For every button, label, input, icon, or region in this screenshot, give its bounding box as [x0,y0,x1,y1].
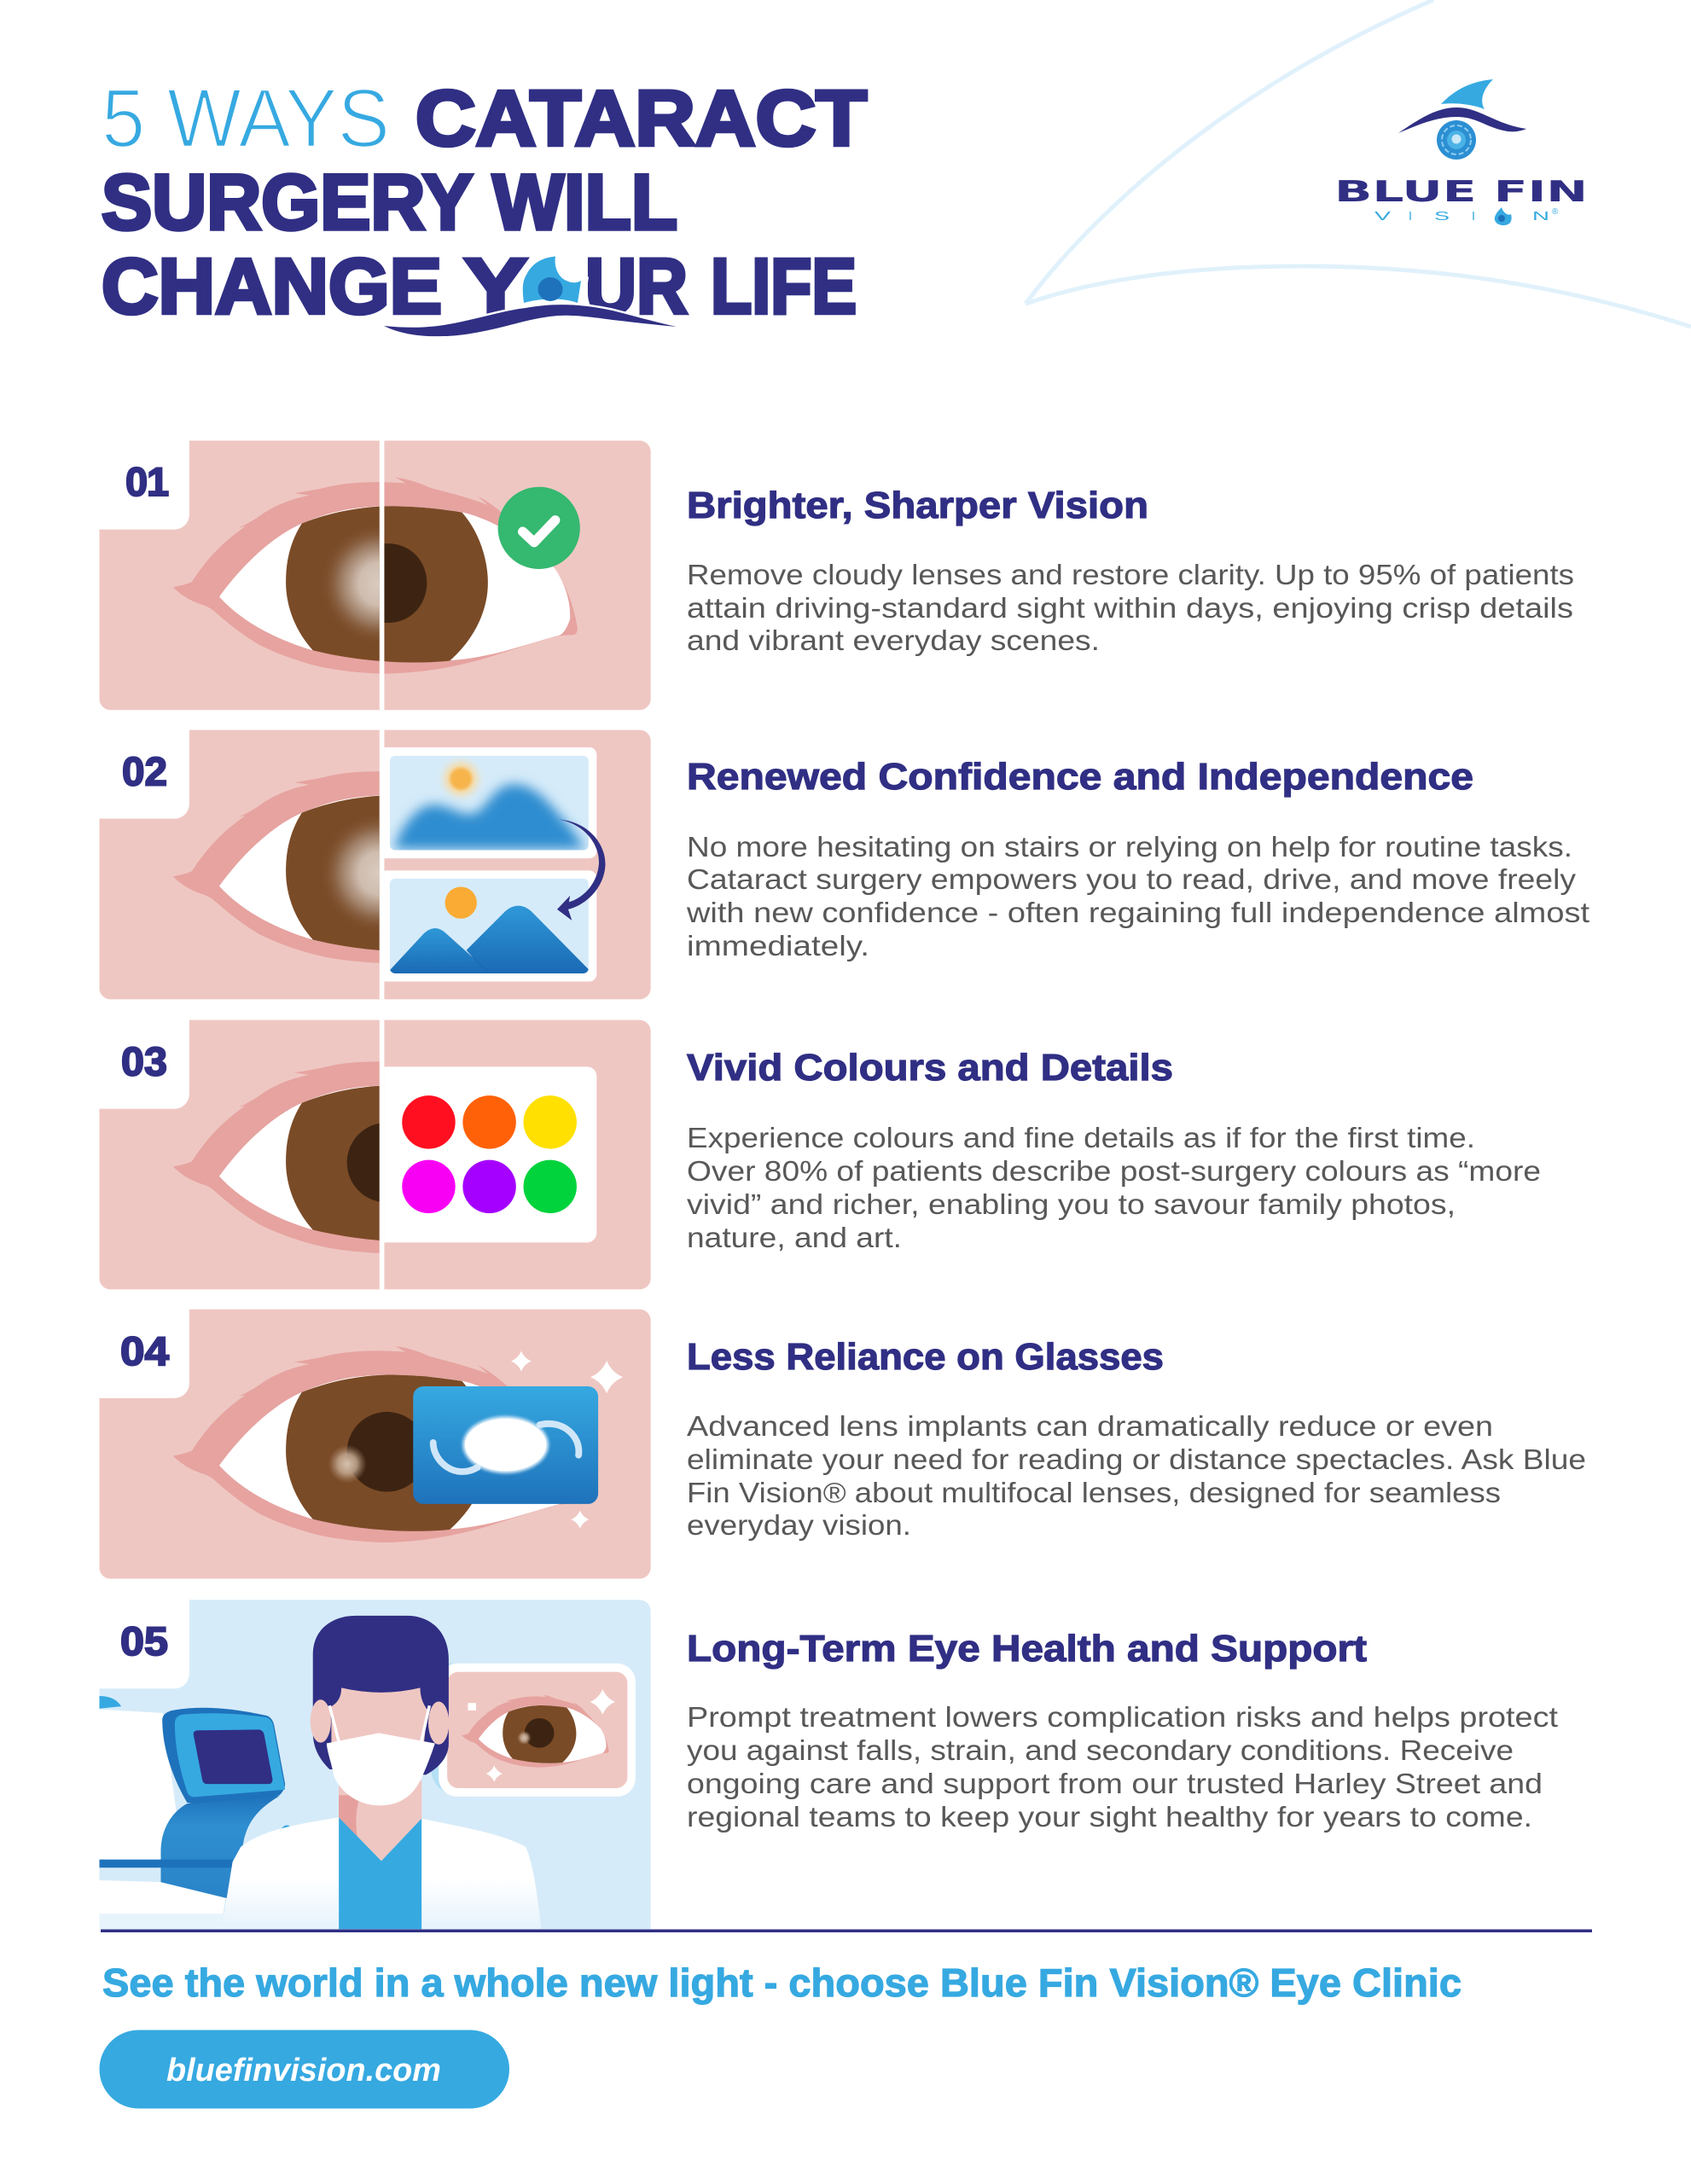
panel 5: long-term support [99,1600,651,1929]
body 3: vivid” and richer, enabling you to savour family photos, [687,1189,1456,1221]
lens card [413,1386,598,1504]
decorative fin outline [1026,0,1691,327]
text block 1 [687,485,1574,657]
body 2: Cataract surgery empowers you to read, drive, and move freely [687,864,1576,896]
title [102,72,867,336]
body 4: Fin Vision® about multifocal lenses, designed for seamless [687,1478,1501,1509]
text block 5 [687,1628,1559,1833]
body 2: No more hesitating on stairs or relying on help for routine tasks. [687,832,1572,863]
body 3: Experience colours and fine details as if for the first time. [687,1123,1475,1154]
call to action: See the world in a whole new light - choose Blue Fin Vision® Eye Clinic [102,1960,1461,2005]
number 02: 02 [122,749,167,793]
body 5: regional teams to keep your sight healthy for years to come. [687,1802,1532,1833]
sharp picture card [384,870,596,981]
text block 2 [686,756,1590,962]
panel 1: brighter vision [99,440,651,710]
logo subline: I [1472,210,1475,224]
body 2: immediately. [687,931,869,962]
logo subline: N [1532,210,1549,224]
body 5: you against falls, strain, and secondary conditions. Receive [687,1735,1514,1767]
body 1 [687,560,1574,657]
title: CHANGE [102,243,442,330]
title: 5 WAYS [102,72,390,165]
text block 3 [687,1047,1541,1254]
icon: blue fin [1441,79,1493,109]
body 2: with new confidence - often regaining full independence almost [686,897,1590,929]
swoosh under title [384,305,677,336]
logo subline [1374,207,1559,225]
website button [99,2030,509,2109]
colour swatches [384,1066,596,1242]
number 03: 03 [121,1039,167,1083]
body 3: nature, and art. [687,1223,902,1254]
number 04: 04 [120,1328,169,1374]
body 1: Remove cloudy lenses and restore clarity. Up to 95% of patients [687,560,1574,591]
arrow [557,820,606,921]
logo subline: S [1434,210,1450,224]
logo wordmark: BLUE FIN [1334,175,1588,209]
exam table [99,1696,233,1929]
logo subline: V [1374,210,1392,224]
doctor [223,1616,541,1929]
logo subline: ® [1552,207,1559,217]
blurry picture card [384,747,596,858]
logo [1334,79,1588,225]
panel 2: confidence [99,730,651,999]
icon: title eye [517,253,589,309]
body 4 [687,1411,1586,1542]
website button: bluefinvision.com [166,2053,441,2088]
heading 5: Long-Term Eye Health and Support [687,1628,1367,1670]
heading 1: Brighter, Sharper Vision [687,485,1148,526]
number 05: 05 [120,1618,168,1664]
panel 3: vivid colours [99,1020,651,1289]
text block 4 [687,1336,1586,1542]
clear pupil [384,543,427,623]
title: Y [464,243,527,330]
body 5: Prompt treatment lowers complication risks and helps protect [687,1702,1559,1734]
body 4: eliminate your need for reading or distance spectacles. Ask Blue [687,1444,1586,1476]
icon: logo eye [1437,120,1476,160]
body 2 [686,832,1590,962]
icon: wave brow [1398,107,1526,133]
icon: sparkles [511,1351,623,1529]
heading 4: Less Reliance on Glasses [687,1336,1164,1378]
slit lamp machine [160,1708,292,1898]
title: UR [585,243,688,330]
heading 2: Renewed Confidence and Independence [687,756,1473,798]
body 5 [687,1702,1559,1833]
body 5: ongoing care and support from our trusted Harley Street and [687,1769,1543,1800]
icon: check badge [498,487,580,569]
body 1: and vibrant everyday scenes. [687,625,1100,657]
body 3 [687,1123,1541,1254]
title: CATARACT [415,75,867,162]
body 4: everyday vision. [687,1510,911,1542]
cloudy lens [328,531,380,636]
heading 3: Vivid Colours and Details [687,1047,1173,1089]
logo subline: I [1409,210,1412,224]
panel 4: less reliance on glasses [99,1310,651,1579]
number 01: 01 [125,459,169,504]
body 3: Over 80% of patients describe post-surgery colours as “more [687,1156,1541,1188]
body 1: attain driving-standard sight within days, enjoying crisp details [687,593,1573,624]
body 4: Advanced lens implants can dramatically reduce or even [687,1411,1493,1443]
title: SURGERY WILL [102,159,677,246]
title: LIFE [711,243,857,330]
inset eye callout [432,1664,636,1797]
